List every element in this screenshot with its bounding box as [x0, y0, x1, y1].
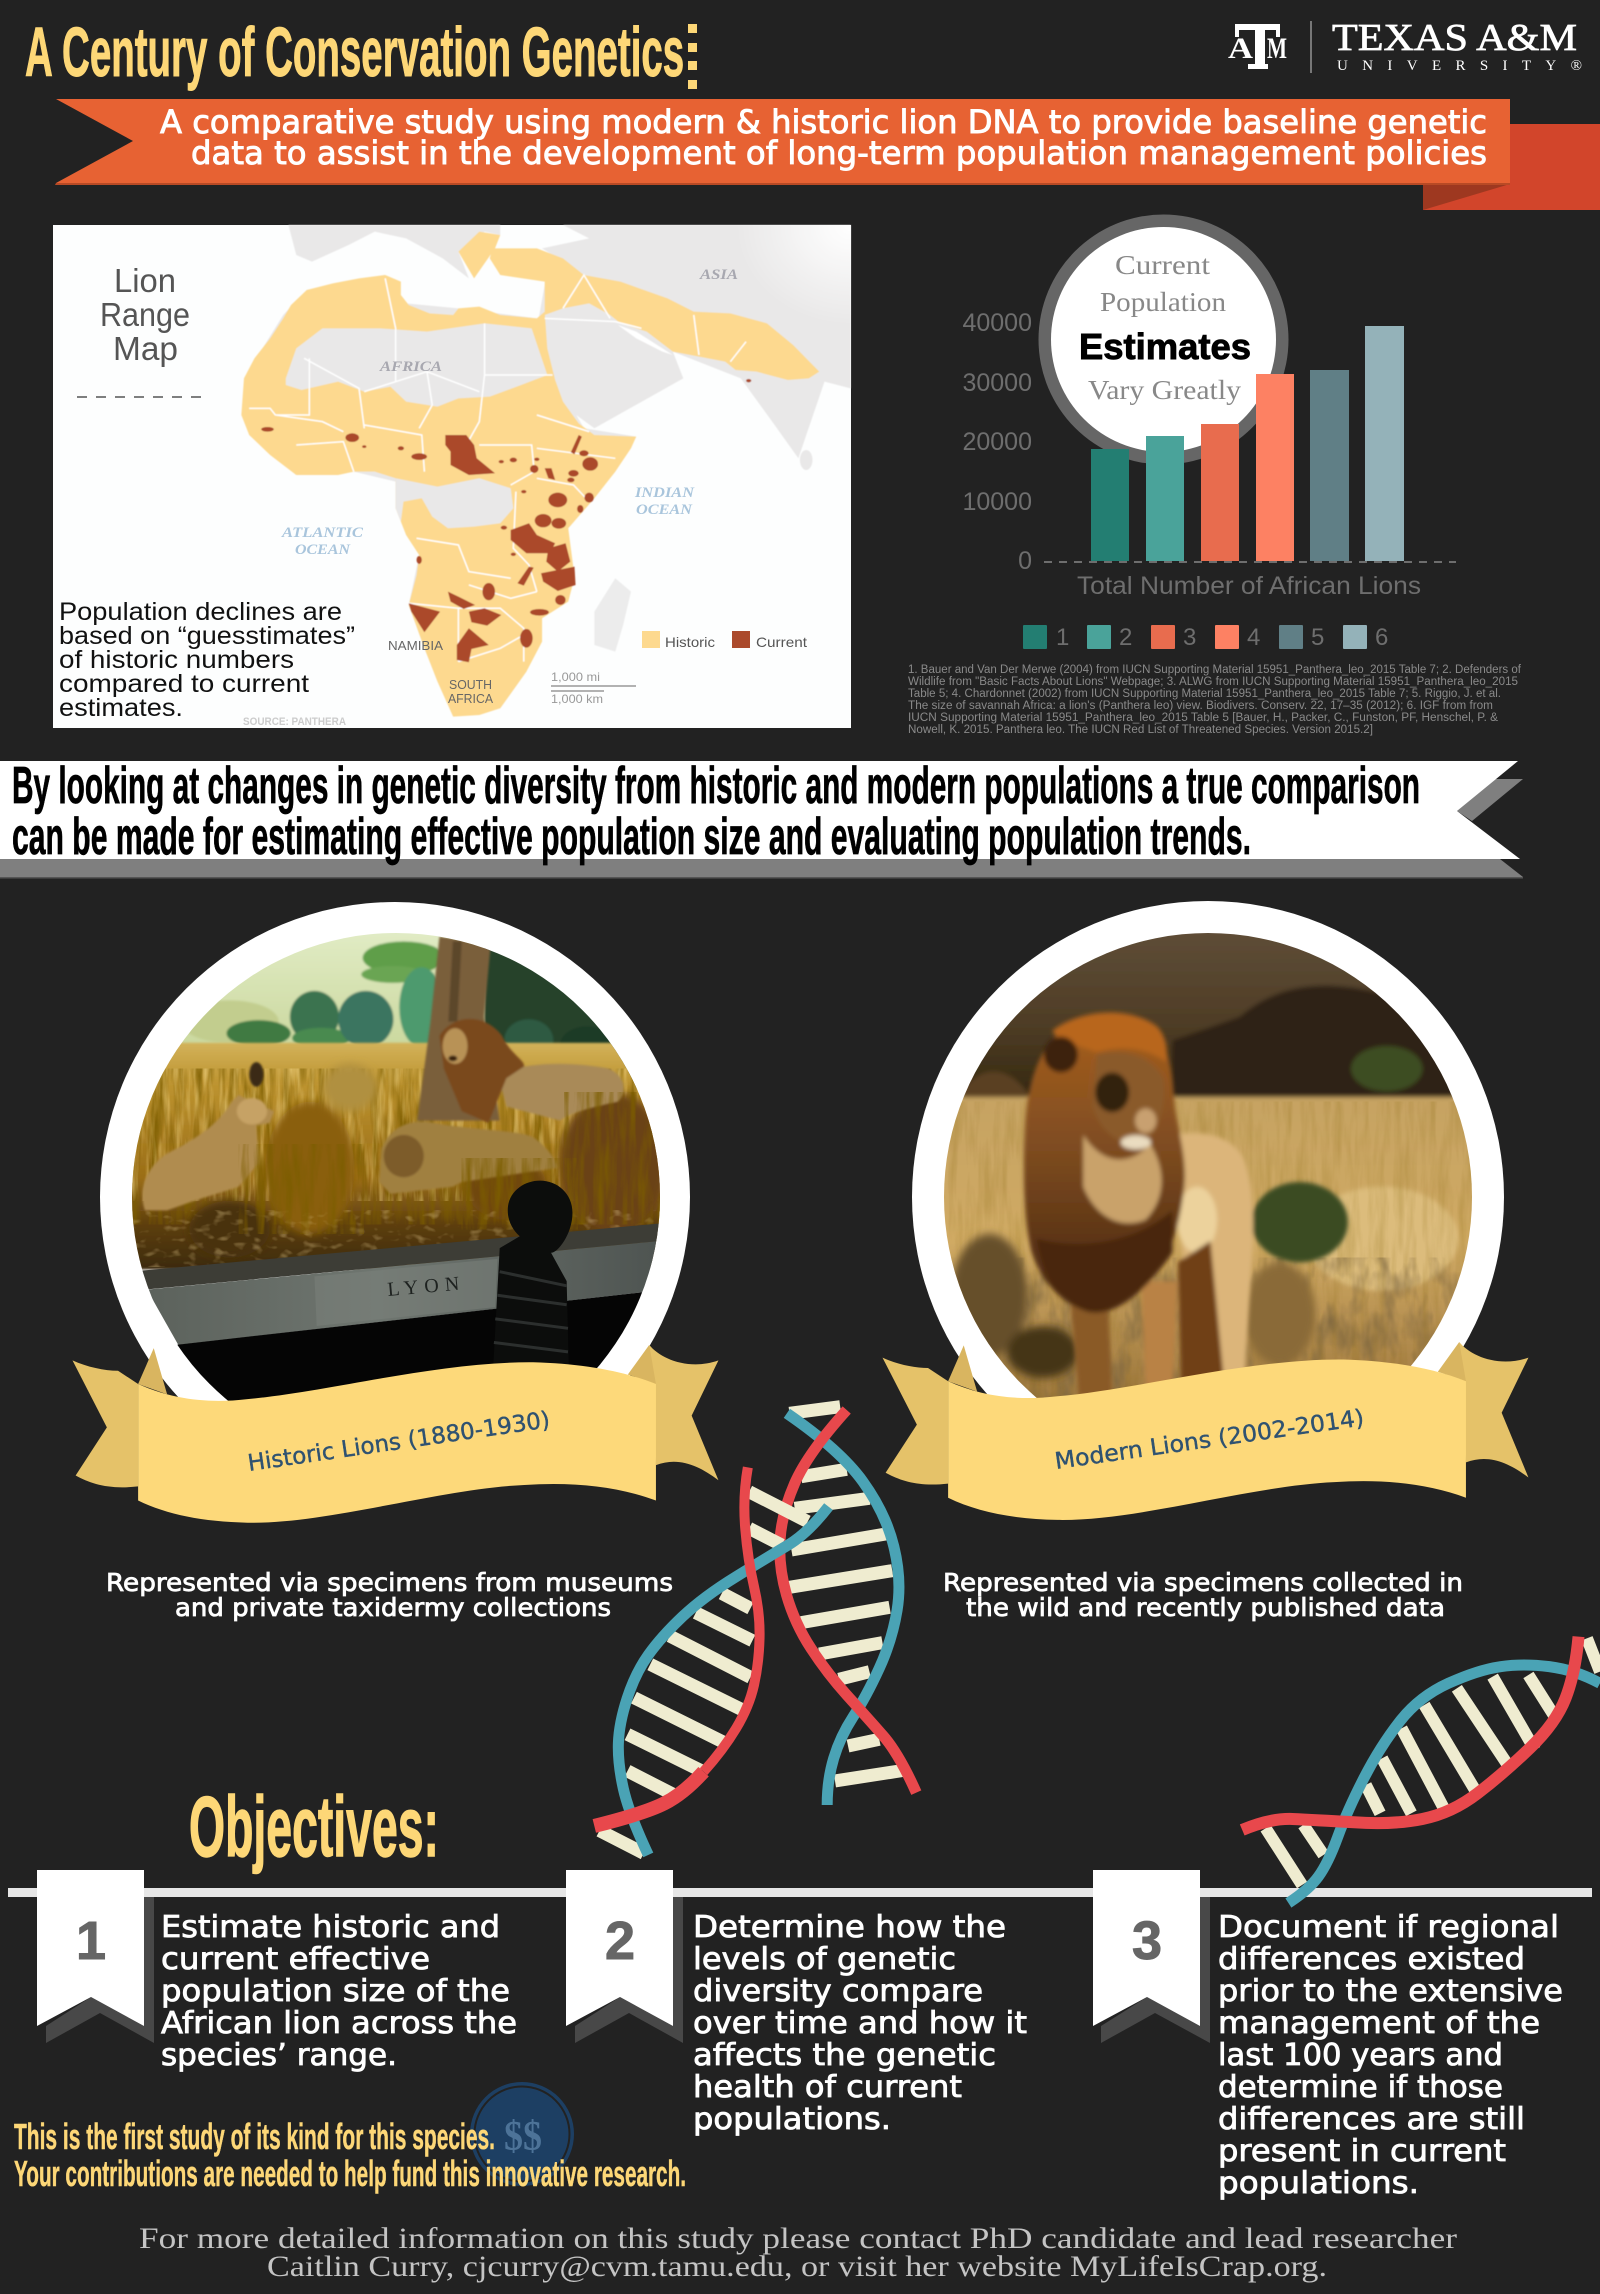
- chart legend: 1: [1056, 624, 1069, 651]
- callout: estimates circle: Population: [1100, 287, 1227, 317]
- chart sources: [908, 664, 1522, 736]
- chart axis labels: 0: [1018, 547, 1032, 575]
- historic description: [106, 1568, 673, 1622]
- map note: [59, 598, 355, 722]
- objective 3 text: determine if those: [1218, 2070, 1503, 2105]
- chart legend: 4: [1247, 624, 1260, 651]
- objective 1: [37, 1870, 517, 2073]
- ribbon: historic: [72, 1345, 718, 1523]
- objective 1 text: population size of the: [161, 1974, 510, 2009]
- map legend: Historic: [665, 634, 715, 650]
- chart axis labels: [962, 309, 1032, 575]
- callout: estimates circle: Vary Greatly: [1088, 375, 1242, 405]
- bar chart: [908, 309, 1522, 736]
- objective 2 text: Determine how the: [693, 1910, 1006, 1945]
- chart legend: 6: [1375, 624, 1388, 651]
- objective 3: [1093, 1870, 1563, 2201]
- objective 2: [566, 1870, 1027, 2137]
- map labels: INDIAN: [634, 485, 695, 501]
- chart axis labels: 10000: [962, 488, 1032, 516]
- chart axis labels: 40000: [962, 309, 1032, 337]
- map shapes: [241, 225, 851, 717]
- icon: donation coin: $$: [504, 2114, 542, 2160]
- title colon mark: [688, 24, 697, 89]
- objective 2 text: [693, 1910, 1027, 2137]
- panel: modern lions: [882, 901, 1528, 1622]
- map note: Population declines are: [59, 598, 342, 626]
- bars: [1091, 326, 1404, 561]
- photo: museum diorama: [132, 933, 660, 1401]
- map labels: AFRICA: [379, 359, 442, 375]
- objective 3: 3: [1132, 1911, 1162, 1971]
- map note: estimates.: [59, 694, 183, 722]
- map labels: SOURCE: PANTHERA: [243, 716, 346, 728]
- chart sources: Table 5; 4. Chardonnet (2002) from IUCN Supporting Material 15951_Panthera_leo_2015 Table 7; 5. Riggio, J. et al.: [908, 688, 1501, 700]
- objective 2 text: populations.: [693, 2102, 891, 2137]
- funding message: Your contributions are needed to help fund this innovative research.: [14, 2153, 686, 2194]
- footer contact: Caitlin Curry, cjcurry@cvm.tamu.edu, or visit her website MyLifeIsCrap.org.: [267, 2250, 1327, 2283]
- objective 2 text: over time and how it: [693, 2006, 1027, 2041]
- objective 3 text: management of the: [1218, 2006, 1540, 2041]
- map heading: [100, 262, 190, 367]
- modern description: [943, 1568, 1463, 1622]
- objective 3 text: differences existed: [1218, 1942, 1525, 1977]
- panel: lion range map: [53, 225, 851, 728]
- map heading: Range: [100, 296, 190, 333]
- objective 3 text: populations.: [1218, 2166, 1419, 2201]
- objective 3 text: last 100 years and: [1218, 2038, 1503, 2073]
- map note: of historic numbers: [59, 646, 294, 674]
- chart axis labels: 30000: [962, 369, 1032, 397]
- objective 1 text: African lion across the: [161, 2006, 517, 2041]
- objective 1 text: current effective: [161, 1942, 430, 1977]
- map labels: OCEAN: [636, 502, 693, 518]
- statement text: [12, 757, 1420, 866]
- map labels: OCEAN: [295, 542, 351, 558]
- chart sources: 1. Bauer and Van Der Merwe (2004) from IUCN Supporting Material 15951_Panthera_leo_2015 Table 7; 2. Defenders of: [908, 664, 1522, 676]
- chart legend: 3: [1183, 624, 1196, 651]
- DNA helix far right: [1242, 1637, 1600, 1903]
- header ribbon: [55, 99, 1600, 210]
- objective 1 text: Estimate historic and: [161, 1910, 500, 1945]
- map note: based on “guesstimates”: [59, 622, 355, 650]
- objective 3 text: differences are still: [1218, 2102, 1525, 2137]
- DNA helix right of centre: [780, 1407, 916, 1805]
- header ribbon text: [160, 103, 1487, 172]
- callout: estimates circle: Estimates: [1079, 326, 1251, 367]
- icon: donation coin: [470, 2082, 574, 2186]
- chart sources: IUCN Supporting Material 15951_Panthera_leo_2015 Table 5 [Bauer, H., Packer, C., Funston, PF, Henschel, P. &: [908, 712, 1498, 724]
- chart legend: 2: [1119, 624, 1132, 651]
- map labels: ATLANTIC: [281, 525, 364, 541]
- footer contact: For more detailed information on this study please contact PhD candidate and lead researcher: [139, 2222, 1457, 2255]
- objective 1 text: species’ range.: [161, 2038, 397, 2073]
- map heading: Lion: [114, 262, 176, 299]
- chart sources: The size of savannah Africa: a lion's (Panthera leo) view. Biodivers. Conserv. 22, 17–35 (2012); 6. IGF from from: [908, 700, 1493, 712]
- statement banner: [0, 757, 1523, 878]
- logo: Texas A&M University: TEXAS A&M: [1332, 17, 1577, 59]
- header ribbon text: A comparative study using modern & historic lion DNA to provide baseline genetic: [160, 103, 1487, 141]
- ribbon label: Historic Lions (1880-1930): [246, 1407, 552, 1477]
- ribbon label: Modern Lions (2002-2014): [1053, 1405, 1366, 1475]
- map labels: AFRICA: [448, 691, 493, 706]
- objective 2 text: affects the genetic: [693, 2038, 996, 2073]
- map labels: 1,000 mi: [551, 670, 600, 684]
- map labels: 1,000 km: [551, 692, 603, 706]
- title: A Century of Conservation Genetics:: [25, 13, 697, 91]
- objective 2 text: diversity compare: [693, 1974, 983, 2009]
- bar chart: Total Number of African Lions: [1077, 572, 1421, 600]
- objective 2 text: levels of genetic: [693, 1942, 956, 1977]
- objective 3 text: Document if regional: [1218, 1910, 1559, 1945]
- funding message: [14, 2116, 686, 2194]
- objective 1: 1: [76, 1911, 106, 1971]
- chart legend: [1023, 624, 1388, 651]
- logo: Texas A&M University: [1228, 17, 1582, 74]
- logo: Texas A&M University: A: [1228, 32, 1253, 65]
- header ribbon text: data to assist in the development of long-term population management policies: [191, 134, 1487, 172]
- map labels: SOUTH: [449, 677, 492, 692]
- logo: Texas A&M University: M: [1267, 32, 1287, 65]
- footer contact: [139, 2222, 1457, 2283]
- objective 2 text: health of current: [693, 2070, 962, 2105]
- modern description: Represented via specimens collected in: [943, 1568, 1463, 1597]
- objective 3 text: [1218, 1910, 1563, 2201]
- objective 3 text: present in current: [1218, 2134, 1506, 2169]
- objectives heading: Objectives:: [189, 1780, 439, 1875]
- map note: compared to current: [59, 670, 309, 698]
- logo: Texas A&M University: UNIVERSITY®: [1337, 58, 1582, 74]
- callout: estimates circle: [1038, 214, 1288, 464]
- map heading: Map: [113, 330, 178, 367]
- funding message: This is the first study of its kind for this species.: [14, 2116, 495, 2157]
- objective 2: 2: [605, 1911, 635, 1971]
- callout: estimates circle: Current: [1115, 250, 1211, 280]
- ribbon: modern: [882, 1342, 1528, 1520]
- modern description: the wild and recently published data: [966, 1593, 1445, 1622]
- map labels: [243, 267, 738, 728]
- chart legend: 5: [1311, 624, 1324, 651]
- objectives rule: [8, 1888, 1592, 1897]
- photo: wild lion: [936, 927, 1480, 1418]
- chart sources: Nowell, K. 2015. Panthera leo. The IUCN Red List of Threatened Species. Version 2015.2]: [908, 724, 1373, 736]
- objective 3 text: prior to the extensive: [1218, 1974, 1563, 2009]
- objective 1 text: [161, 1910, 517, 2073]
- DNA helix left of centre: [594, 1467, 828, 1855]
- photo: museum diorama: LYON: [387, 1273, 460, 1301]
- panel: historic lions: [72, 902, 718, 1622]
- historic description: Represented via specimens from museums: [106, 1568, 673, 1597]
- map labels: NAMIBIA: [388, 638, 443, 653]
- map legend: Current: [756, 634, 807, 650]
- historic description: and private taxidermy collections: [175, 1593, 611, 1622]
- chart sources: Wildlife from "Basic Facts About Lions" Webpage; 3. ALWG from IUCN Supporting Material 15951_Panthera_leo_2015: [908, 676, 1518, 688]
- chart axis labels: 20000: [962, 428, 1032, 456]
- map labels: ASIA: [699, 267, 738, 283]
- map legend: [642, 631, 807, 650]
